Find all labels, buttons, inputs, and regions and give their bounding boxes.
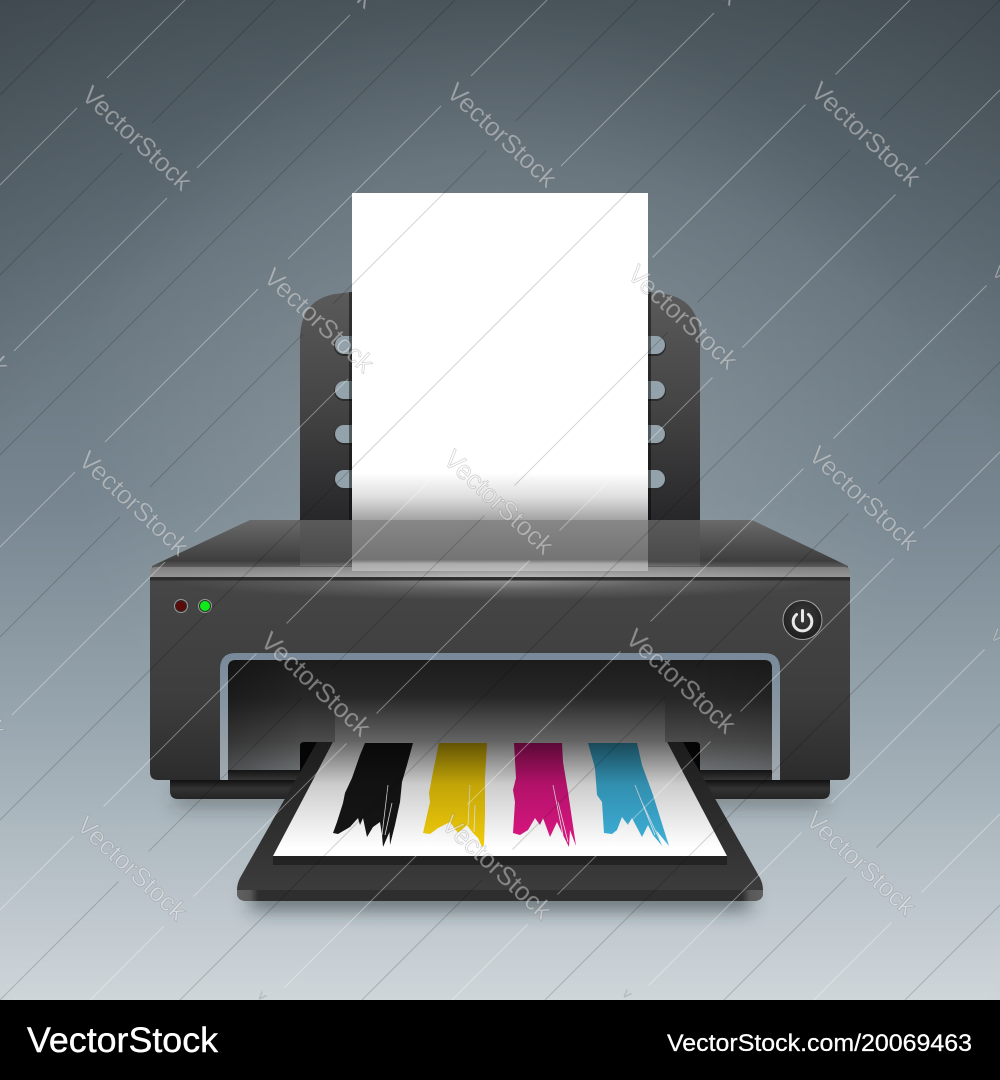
watermark text: VectorStock (803, 440, 926, 557)
watermark text: V (255, 991, 267, 1004)
watermark text: VectorStock (805, 76, 928, 193)
footer logo text: VectorStock (27, 1021, 219, 1060)
ink stroke: yellow (423, 743, 487, 847)
ink stroke: magenta (513, 743, 576, 847)
printed sheet with ink strokes (273, 742, 727, 856)
watermark text: VectorStock (258, 262, 381, 379)
watermark text: V (620, 989, 632, 1002)
indicator light: green (198, 600, 212, 612)
ink stroke: black (333, 743, 413, 847)
watermark text: VectorStock (620, 623, 743, 740)
output tray (237, 742, 763, 901)
ink stroke: cyan (588, 743, 669, 847)
watermark text: VectorStock (438, 444, 561, 561)
printer body (150, 560, 850, 780)
paper reflection on top shell (352, 520, 648, 571)
watermark text: VectorStock (71, 810, 194, 927)
indicator light: red (174, 600, 188, 612)
printer shadow (175, 792, 825, 910)
printer feet (170, 780, 830, 799)
watermark text: VectorStock (800, 805, 923, 922)
watermark text: VectorStock (441, 77, 564, 194)
watermark text: VectorStock (73, 445, 196, 562)
printer (150, 193, 850, 910)
watermark text: VectorStock (255, 626, 378, 743)
printer top shell (152, 520, 848, 568)
watermark text: VectorStock (436, 809, 559, 926)
watermark text: VectorStock (76, 80, 199, 197)
paper holder (300, 292, 700, 520)
output opening (220, 653, 780, 780)
footer bar (0, 1000, 1000, 1080)
watermark text: VectorStock (622, 259, 745, 376)
front lip (150, 567, 850, 578)
paper sheet (352, 193, 648, 520)
icon: power button (783, 600, 822, 640)
footer image id: VectorStock.com/20069463 (667, 1030, 972, 1057)
